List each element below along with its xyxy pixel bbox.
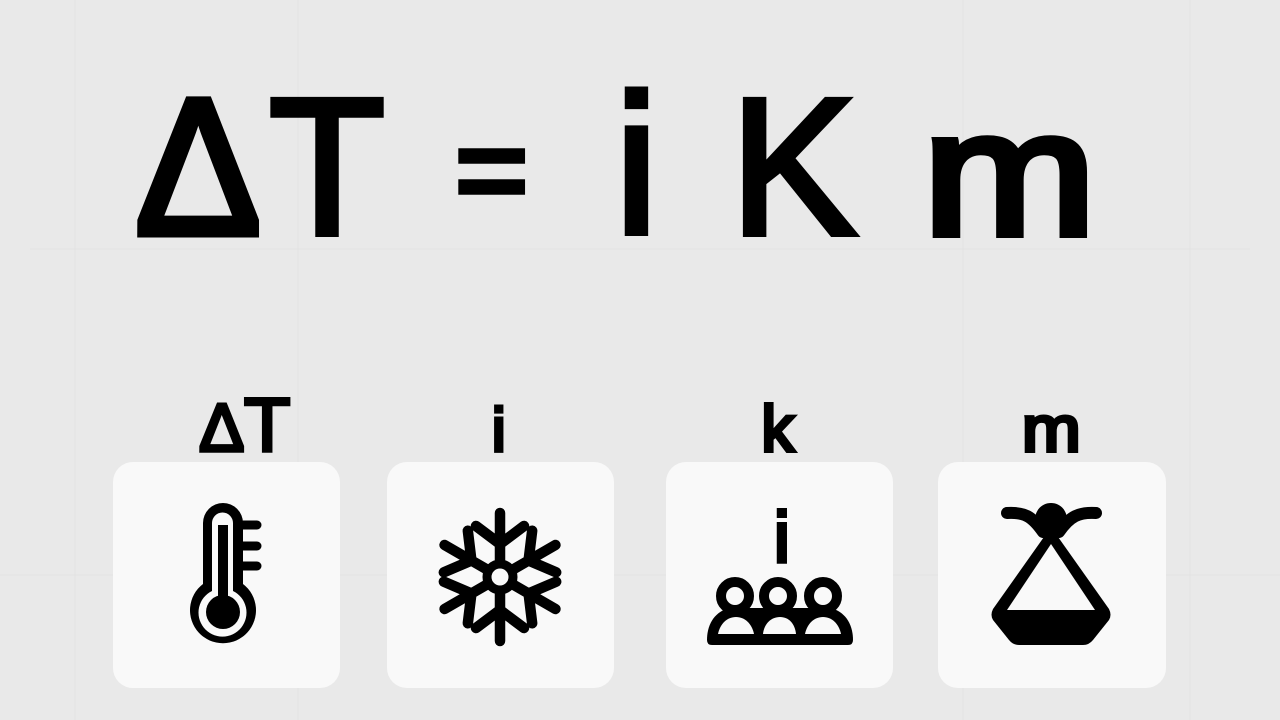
card: m xyxy=(938,394,1166,688)
card background xyxy=(938,462,1166,688)
i: i xyxy=(614,54,658,275)
T: T xyxy=(269,58,385,276)
icon: i above three people xyxy=(707,499,853,645)
K: K xyxy=(730,57,856,276)
card background xyxy=(113,462,340,688)
label: delta T: T xyxy=(244,383,290,468)
icon: snowflake xyxy=(433,513,567,641)
title: formula xyxy=(135,54,1096,276)
delta symbol: Δ xyxy=(135,57,261,276)
icon: thermometer xyxy=(190,503,257,643)
card: i xyxy=(387,396,614,688)
label: delta T xyxy=(199,383,290,468)
label: m: m xyxy=(1022,394,1081,465)
people group xyxy=(707,582,853,645)
label: i: i xyxy=(492,396,506,464)
card: delta T xyxy=(113,383,340,688)
m: m xyxy=(923,75,1096,271)
equals sign: = xyxy=(456,102,528,240)
label: delta T: Δ xyxy=(199,390,244,466)
icon: hanging weight xyxy=(992,503,1110,645)
small i: i xyxy=(774,499,790,578)
card: k xyxy=(666,392,893,688)
card background xyxy=(666,462,893,688)
label: k: k xyxy=(762,392,794,465)
card background xyxy=(387,462,614,688)
